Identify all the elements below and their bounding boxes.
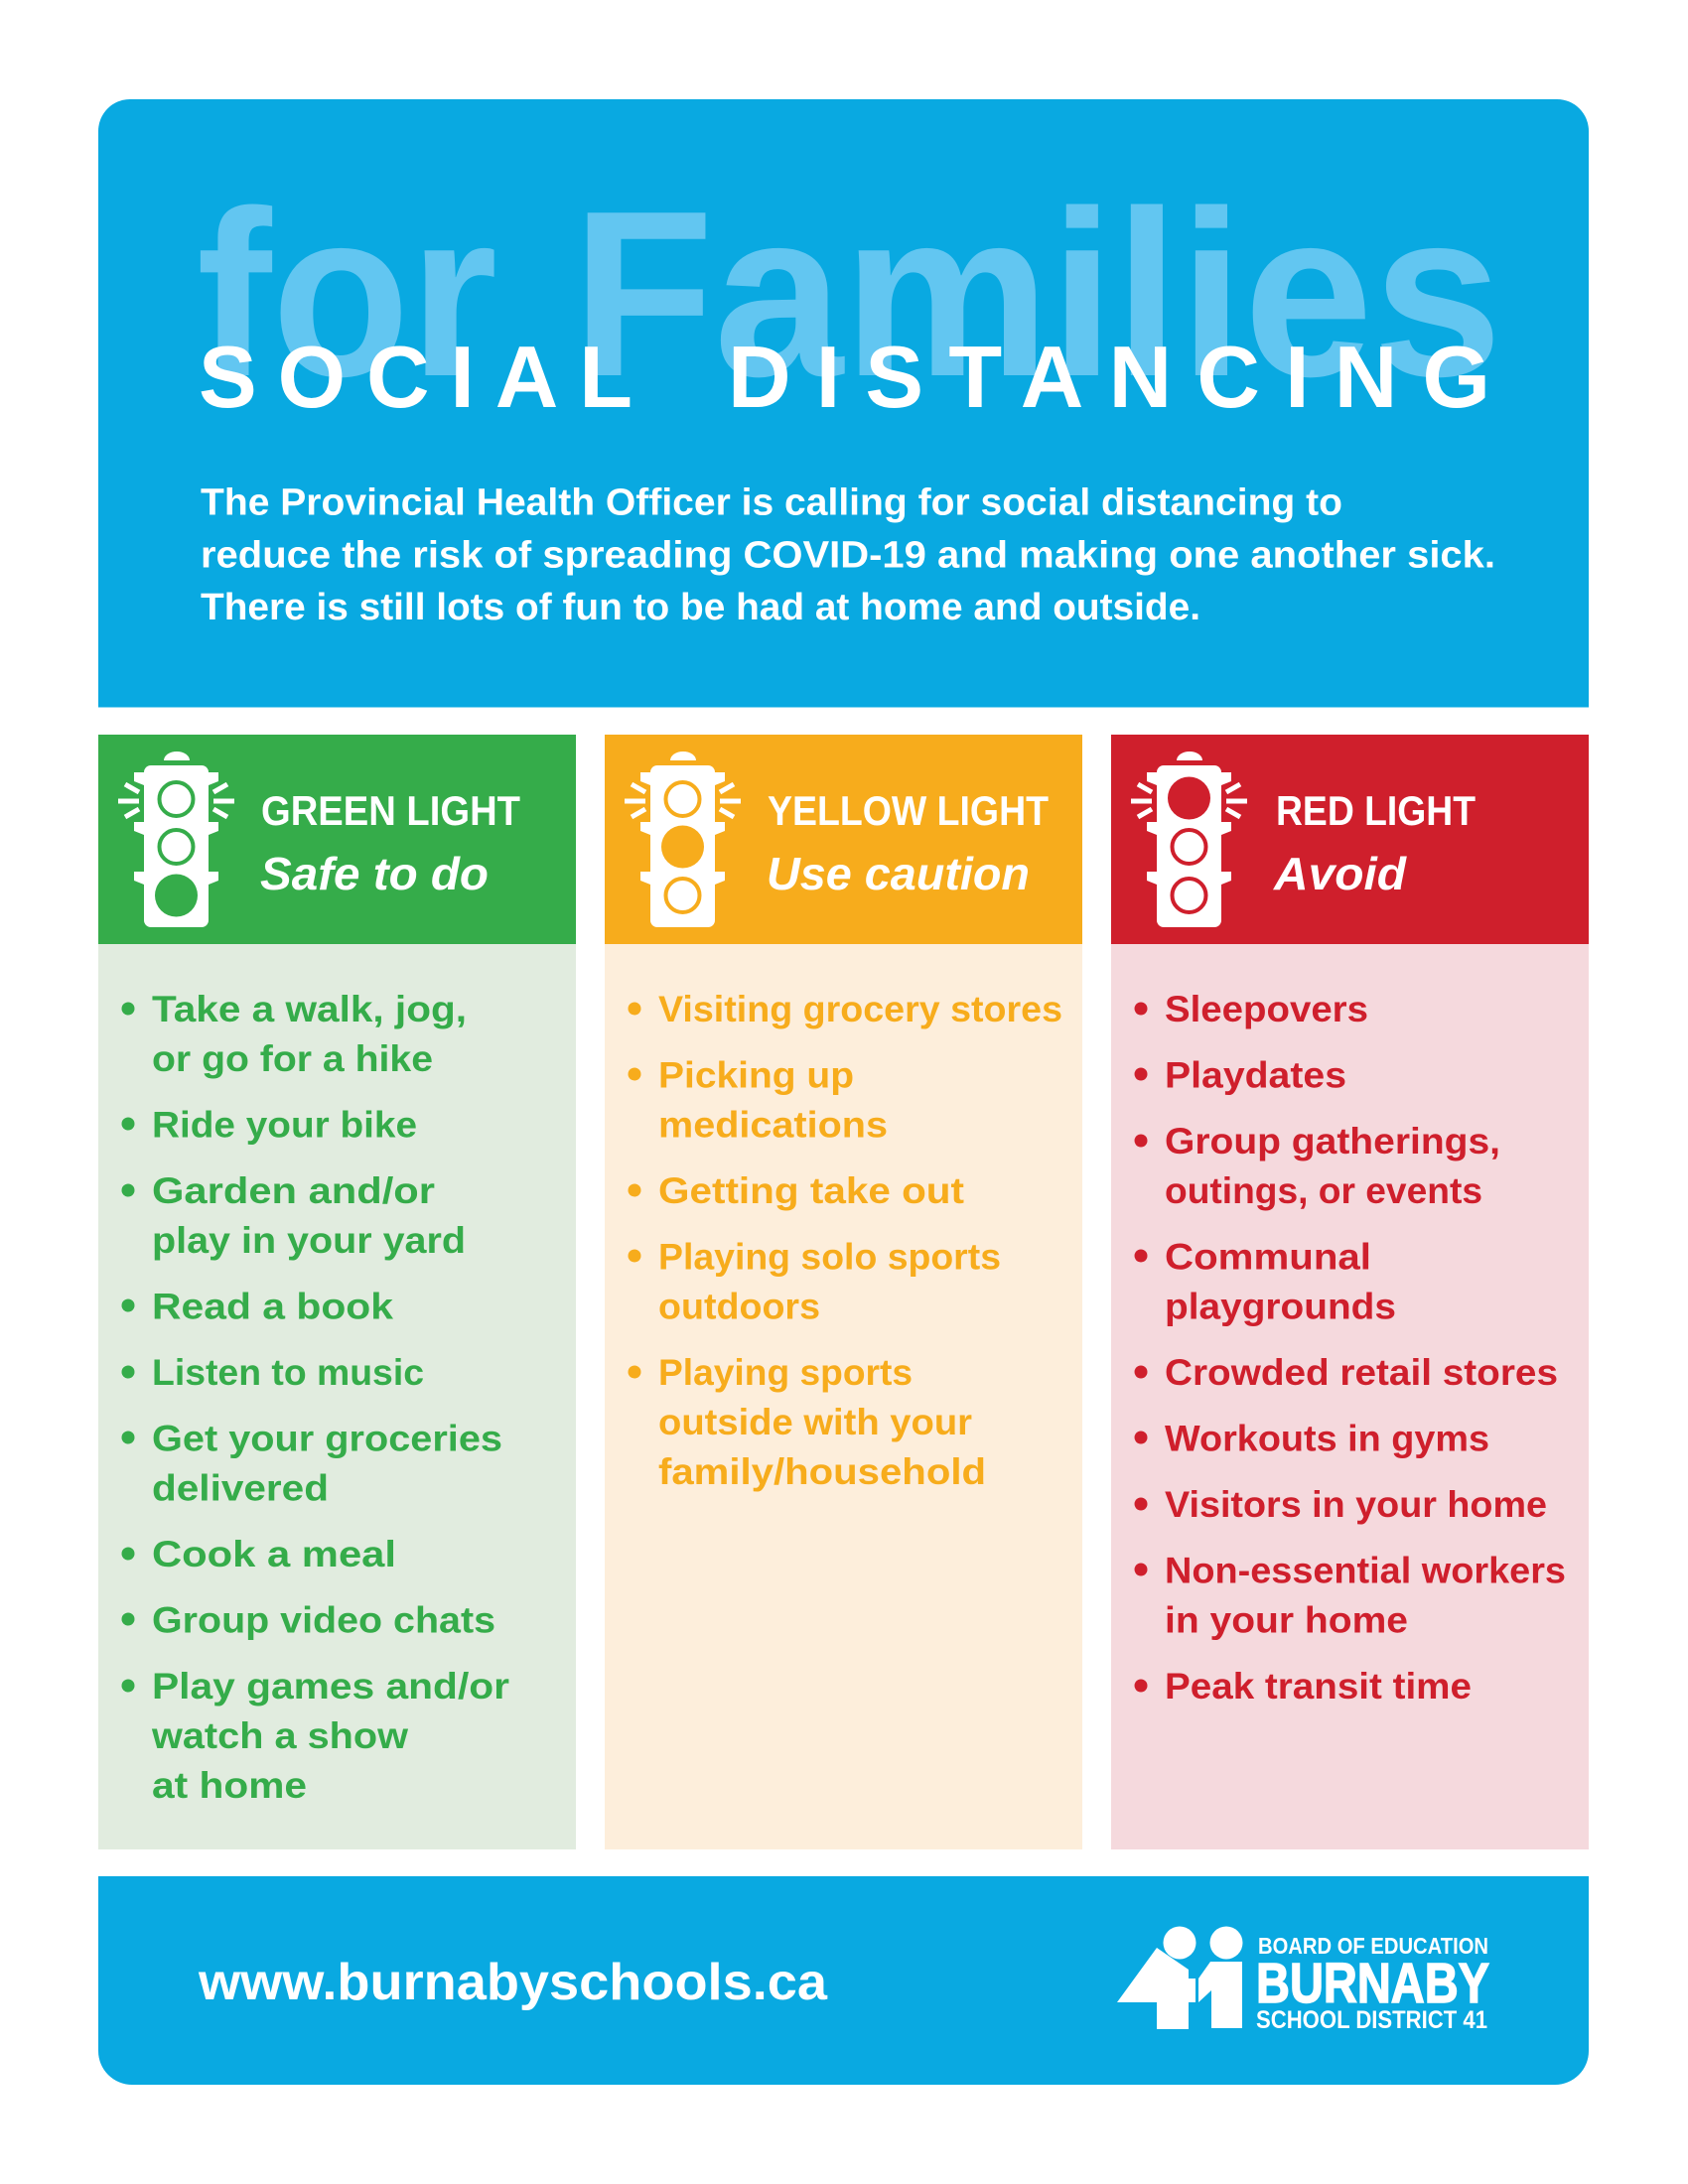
icon: green traffic light xyxy=(118,751,234,927)
red list: Group gatherings, xyxy=(1165,1121,1500,1161)
red list: Peak transit time xyxy=(1165,1666,1472,1706)
logo: Burnaby School District 41: BURNABY xyxy=(1256,1952,1489,2015)
red list: Workouts in gyms xyxy=(1165,1418,1489,1459)
yellow heading xyxy=(767,787,1049,899)
red list: in your home xyxy=(1165,1600,1408,1640)
green list: Cook a meal xyxy=(152,1534,396,1574)
green list: Read a book xyxy=(152,1287,393,1326)
intro text: The Provincial Health Officer is calling for social distancing to xyxy=(201,482,1342,524)
intro text: reduce the risk of spreading COVID-19 and making one another sick. xyxy=(201,534,1495,576)
background title: for Families: for xyxy=(197,163,497,426)
yellow heading: YELLOW LIGHT xyxy=(768,787,1049,834)
red list: outings, or events xyxy=(1165,1170,1482,1211)
yellow list: Playing sports xyxy=(658,1352,913,1393)
red heading xyxy=(1273,787,1476,899)
red list: playgrounds xyxy=(1165,1287,1396,1326)
yellow list: family/household xyxy=(658,1451,986,1492)
yellow list xyxy=(628,989,1062,1492)
yellow heading: Use caution xyxy=(767,848,1030,899)
green list: Garden and/or xyxy=(152,1170,435,1211)
green list: Group video chats xyxy=(152,1600,495,1640)
red list: Communal xyxy=(1165,1237,1371,1277)
red list: Playdates xyxy=(1165,1054,1346,1096)
logo: Burnaby School District 41: SCHOOL DISTRICT 41 xyxy=(1256,2006,1487,2034)
green list: Play games and/or xyxy=(152,1666,509,1706)
green list: at home xyxy=(152,1765,307,1806)
yellow list: Playing solo sports xyxy=(658,1237,1001,1277)
panel: yellow light xyxy=(605,735,1082,1849)
yellow list: Getting take out xyxy=(658,1170,964,1211)
green list: play in your yard xyxy=(152,1220,466,1261)
yellow list: outside with your xyxy=(658,1402,972,1442)
website url: www.burnabyschools.ca xyxy=(198,1954,828,2011)
green list: Listen to music xyxy=(152,1352,424,1393)
red header bar xyxy=(1111,735,1589,944)
red list: Crowded retail stores xyxy=(1165,1352,1558,1393)
red list xyxy=(1134,989,1566,1706)
title: social distancing: DISTANCING xyxy=(728,328,1490,426)
red heading: RED LIGHT xyxy=(1276,787,1476,834)
green list: delivered xyxy=(152,1467,329,1509)
panel: footer xyxy=(98,1876,1589,2085)
green header bar xyxy=(98,735,576,944)
intro text xyxy=(201,482,1495,628)
red heading: Avoid xyxy=(1273,848,1407,899)
yellow list: outdoors xyxy=(658,1287,820,1326)
green list: watch a show xyxy=(151,1715,408,1756)
yellow list: Visiting grocery stores xyxy=(658,989,1062,1029)
panel: red light xyxy=(1111,735,1589,1849)
yellow list: medications xyxy=(658,1104,888,1146)
green heading: GREEN LIGHT xyxy=(261,787,520,834)
green list xyxy=(121,989,509,1806)
green list: Get your groceries xyxy=(152,1418,502,1459)
icon: red traffic light xyxy=(1131,751,1247,927)
background title: for Families: Families xyxy=(572,163,1502,426)
panel: header banner xyxy=(98,99,1589,707)
yellow list: Picking up xyxy=(658,1054,854,1096)
logo: Burnaby School District 41 xyxy=(1117,1926,1489,2034)
green list: Ride your bike xyxy=(152,1104,417,1146)
title: social distancing xyxy=(199,328,1490,426)
red list: Sleepovers xyxy=(1165,989,1368,1029)
icon: yellow traffic light xyxy=(625,751,741,927)
green list: or go for a hike xyxy=(152,1038,433,1079)
panel: green light xyxy=(98,735,576,1849)
red list: Visitors in your home xyxy=(1165,1484,1547,1525)
logo: Burnaby School District 41: BOARD OF EDUCATION xyxy=(1258,1933,1488,1959)
yellow header bar xyxy=(605,735,1082,944)
red list: Non-essential workers xyxy=(1165,1551,1566,1590)
intro text: There is still lots of fun to be had at home and outside. xyxy=(201,587,1200,628)
green heading: Safe to do xyxy=(260,848,489,899)
green heading xyxy=(260,787,520,899)
green list: Take a walk, jog, xyxy=(152,989,467,1029)
title: social distancing: SOCIAL xyxy=(199,328,633,426)
